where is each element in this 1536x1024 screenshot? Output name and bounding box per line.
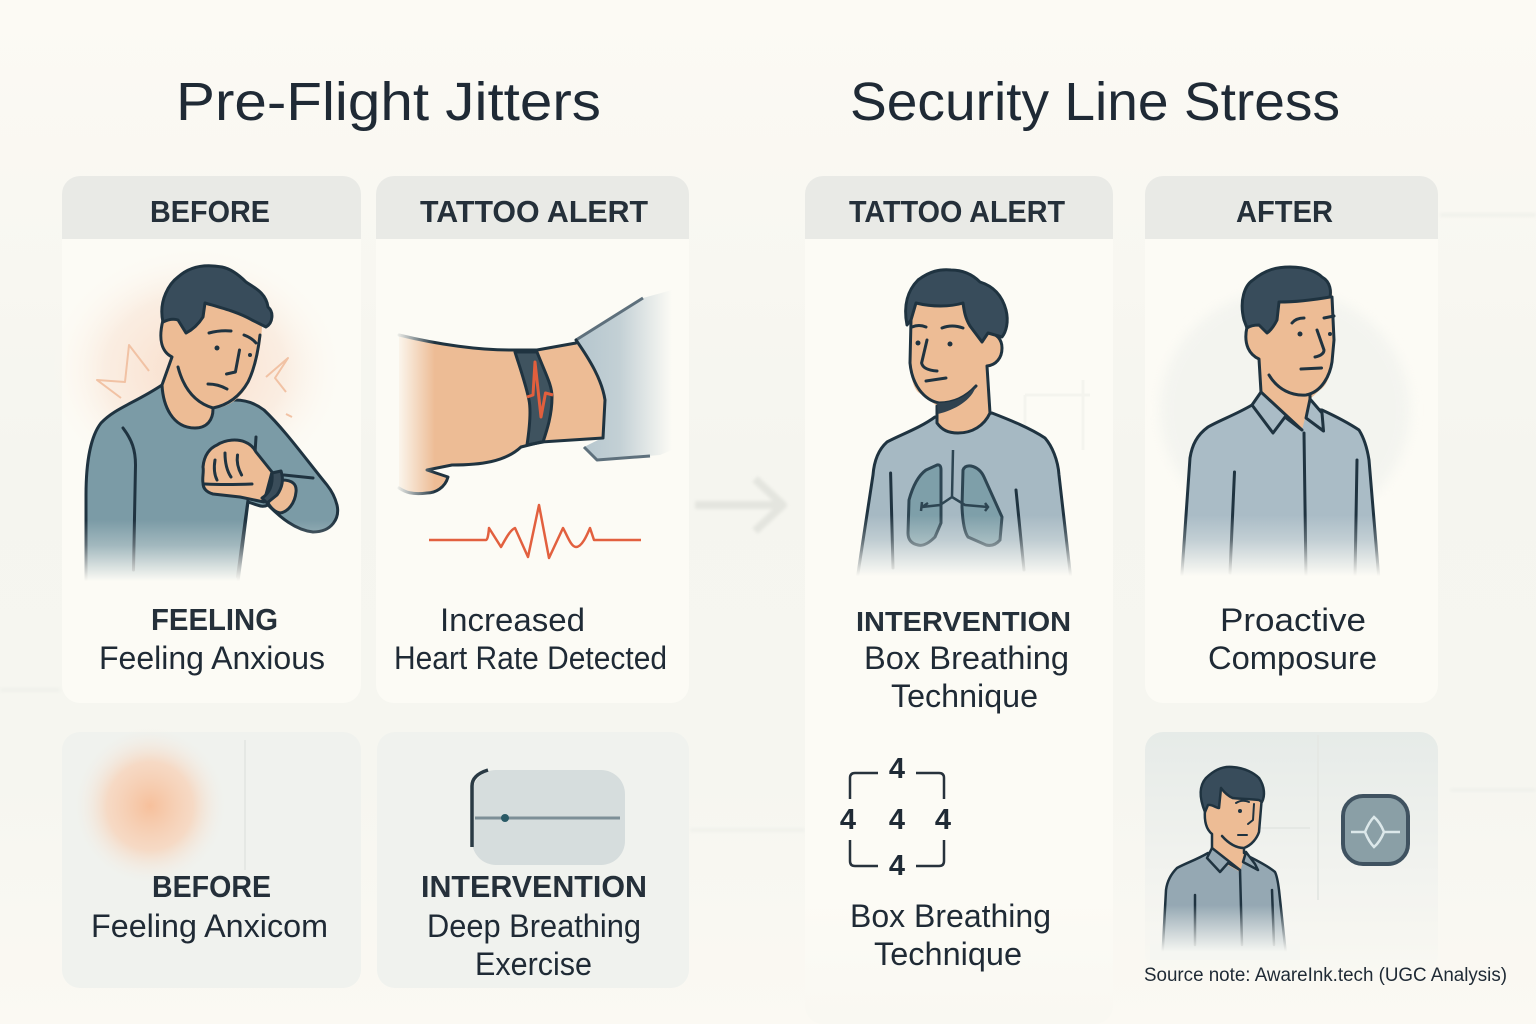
label: increased heart rate: Increased — [440, 602, 585, 638]
heading: after: AFTER — [1236, 194, 1333, 229]
label: intervention box breathing: Box Breathing — [864, 640, 1069, 676]
diagram: box breathing square: 4 — [889, 753, 905, 785]
heading: tattoo alert: TATTOO ALERT — [849, 194, 1065, 229]
diagram: box breathing square: 4 — [935, 804, 951, 836]
title: Pre-Flight Jitters: Pre-Flight Jitters — [176, 72, 601, 132]
diagram: box breathing square — [840, 753, 951, 882]
label: increased heart rate: Heart Rate Detected — [394, 640, 667, 676]
title: Security Line Stress: Security Line Stress — [850, 72, 1340, 132]
panel: before, feeling anxious — [62, 726, 361, 988]
label: proactive composure: Proactive — [1220, 602, 1366, 638]
label: increased heart rate — [394, 602, 667, 676]
icon: lungs — [908, 450, 1002, 545]
label: intervention: INTERVENTION — [421, 869, 647, 904]
panel: after, small figure — [1145, 732, 1438, 972]
label: box breathing technique: Box Breathing — [850, 898, 1051, 934]
arrow — [695, 479, 783, 531]
source note: Source note: AwareInk.tech (UGC Analysis) — [1144, 965, 1507, 986]
label: intervention box breathing: INTERVENTION — [856, 606, 1071, 637]
label: before: BEFORE — [152, 869, 271, 904]
label: intervention box breathing — [856, 606, 1071, 714]
illustration: man with lungs — [850, 270, 1080, 587]
icon: breathing device — [472, 770, 625, 865]
chart: heartbeat trace — [429, 505, 641, 558]
label: feeling: FEELING — [151, 602, 278, 637]
illustration: small man — [1150, 767, 1300, 960]
heading: before: BEFORE — [150, 194, 270, 229]
diagram: box breathing square: 4 — [889, 850, 905, 882]
label: feeling — [99, 602, 325, 676]
label: intervention: Exercise — [475, 946, 592, 982]
label: box breathing technique — [850, 898, 1051, 972]
label: before: Feeling Anxicom — [91, 908, 328, 944]
label: intervention box breathing: Technique — [891, 678, 1038, 714]
panel: tattoo alert, intervention — [805, 176, 1113, 1024]
label: before — [91, 869, 328, 944]
diagram: box breathing square: 4 — [889, 804, 905, 836]
panel: intervention, deep breathing — [377, 732, 689, 988]
label: proactive composure: Composure — [1208, 640, 1377, 676]
icon: blurred orange glow — [72, 726, 228, 886]
illustration: forearm with tattoo band — [395, 290, 672, 500]
illustration: composed man — [1160, 267, 1410, 587]
heading: tattoo alert: TATTOO ALERT — [420, 194, 648, 229]
label: intervention: Deep Breathing — [427, 908, 641, 944]
panel: tattoo alert, increased heart rate — [376, 176, 689, 703]
label: intervention — [421, 869, 647, 982]
icon: rounded monitor — [1343, 796, 1408, 864]
diagram: box breathing square: 4 — [840, 804, 856, 836]
label: feeling: Feeling Anxious — [99, 640, 325, 676]
illustration: anxious man checking wrist — [45, 245, 345, 592]
label: box breathing technique: Technique — [874, 936, 1022, 972]
panel: before — [45, 176, 361, 703]
label: proactive composure — [1208, 602, 1377, 676]
panel: after — [1145, 176, 1438, 703]
